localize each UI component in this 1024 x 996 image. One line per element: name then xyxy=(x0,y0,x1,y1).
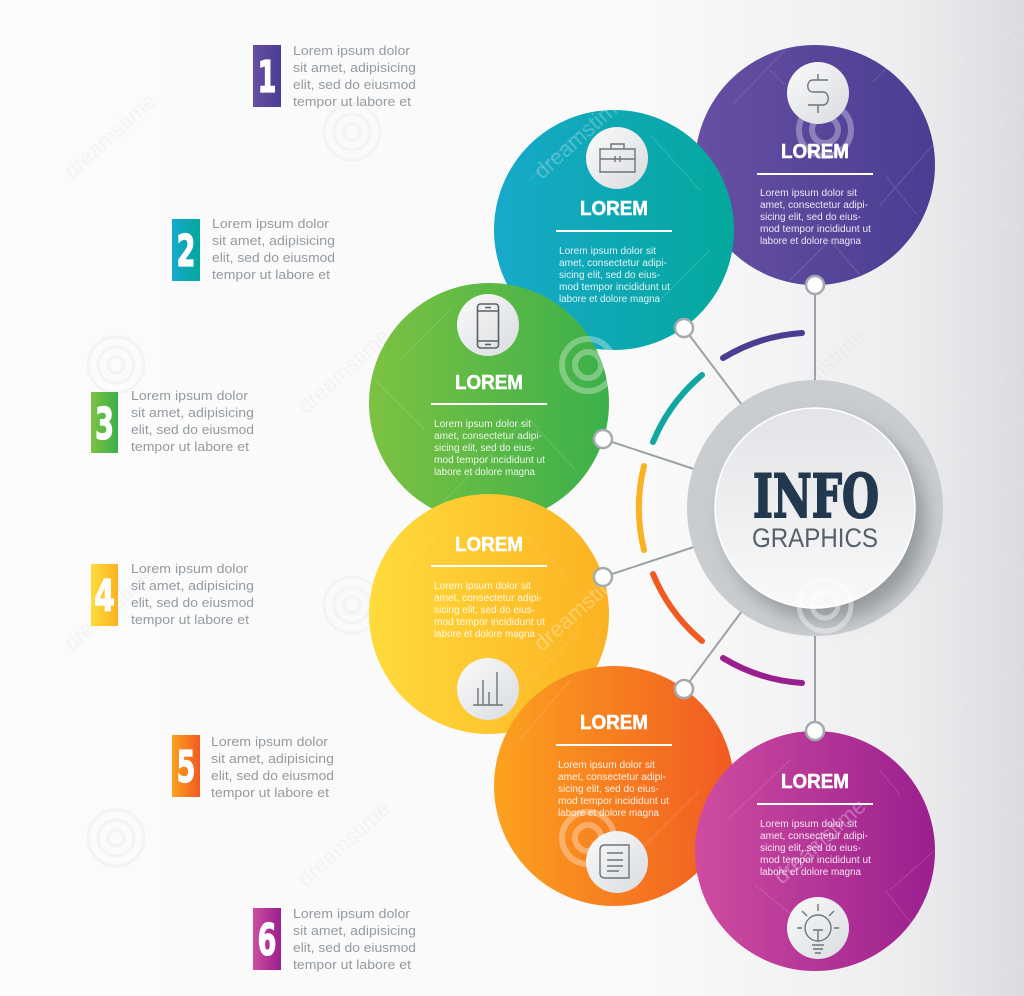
panel: yellow circle xyxy=(369,494,631,734)
legend item 1: elit, sed do eiusmod xyxy=(293,77,416,92)
icon: briefcase xyxy=(586,127,648,189)
text: magenta: Lorem ipsum dolor sit xyxy=(760,819,857,830)
text: purple xyxy=(760,188,871,247)
text: yellow: labore et dolore magna xyxy=(434,629,535,640)
legend item 5: 5 xyxy=(176,742,196,793)
heading: magenta: LOREM xyxy=(781,771,849,793)
text: magenta xyxy=(760,819,871,878)
icon: smartphone xyxy=(457,294,519,356)
text: orange xyxy=(558,760,669,819)
legend item 6 xyxy=(253,906,416,972)
text: yellow: mod tempor incididunt ut xyxy=(434,617,545,628)
text: magenta: sicing elit, sed do eius- xyxy=(760,843,861,854)
icon: dollar xyxy=(787,62,849,124)
text: teal xyxy=(559,246,670,305)
watermark text on background: dreamstime xyxy=(59,88,161,184)
heading: purple: LOREM xyxy=(781,141,849,163)
panel: magenta circle xyxy=(695,731,935,971)
heading: orange: LOREM xyxy=(580,712,648,734)
heading: green: LOREM xyxy=(455,372,523,394)
watermark text on background: dreamstime xyxy=(293,796,395,892)
text: purple: Lorem ipsum dolor sit xyxy=(760,188,857,199)
text: magenta: labore et dolore magna xyxy=(760,867,861,878)
text: orange: sicing elit, sed do eius- xyxy=(558,784,659,795)
legend item 3: tempor ut labore et xyxy=(131,439,249,454)
legend item 4: tempor ut labore et xyxy=(131,612,249,627)
text: yellow: amet, consectetur adipi- xyxy=(434,593,542,604)
text: orange: Lorem ipsum dolor sit xyxy=(558,760,655,771)
watermark text on background: dreamstime xyxy=(293,323,395,419)
panel: teal circle xyxy=(494,88,734,350)
legend item 2: Lorem ipsum dolor xyxy=(212,216,330,231)
legend item 6: elit, sed do eiusmod xyxy=(293,940,416,955)
title: GRAPHICS: GRAPHICS xyxy=(752,523,878,553)
text: magenta: amet, consectetur adipi- xyxy=(760,831,868,842)
panel: green circle xyxy=(369,283,614,523)
panel: purple circle xyxy=(695,45,935,285)
text: orange: mod tempor incididunt ut xyxy=(558,796,669,807)
panel: magenta circle: dreamstime xyxy=(769,793,871,889)
text: green: amet, consectetur adipi- xyxy=(434,431,542,442)
icon: light bulb xyxy=(787,897,849,959)
legend item 3: sit amet, adipisicing xyxy=(131,405,254,420)
legend item 2 xyxy=(172,216,335,282)
text: teal: labore et dolore magna xyxy=(559,294,660,305)
connectors xyxy=(603,285,815,731)
legend item 5: tempor ut labore et xyxy=(211,785,329,800)
legend item 4 xyxy=(91,561,254,627)
legend item 2: tempor ut labore et xyxy=(212,267,330,282)
text: orange: amet, consectetur adipi- xyxy=(558,772,666,783)
legend item 4: elit, sed do eiusmod xyxy=(131,595,254,610)
legend item 3 xyxy=(91,388,254,454)
watermark text on background xyxy=(59,88,871,892)
text: teal: amet, consectetur adipi- xyxy=(559,258,667,269)
text: green xyxy=(434,419,545,478)
heading: teal: LOREM xyxy=(580,198,648,220)
legend item 6: 6 xyxy=(258,915,276,966)
center hub xyxy=(687,380,943,636)
text: magenta: mod tempor incididunt ut xyxy=(760,855,871,866)
text: green: Lorem ipsum dolor sit xyxy=(434,419,531,430)
legend item 2: sit amet, adipisicing xyxy=(212,233,335,248)
icon: document xyxy=(586,831,648,893)
connector nodes xyxy=(594,276,824,740)
heading: yellow: LOREM xyxy=(455,534,523,556)
legend item 4: 4 xyxy=(94,571,115,622)
legend item 1: 1 xyxy=(258,52,276,103)
text: purple: labore et dolore magna xyxy=(760,236,861,247)
text: purple: mod tempor incididunt ut xyxy=(760,224,871,235)
text: purple: sicing elit, sed do eius- xyxy=(760,212,861,223)
text: yellow: Lorem ipsum dolor sit xyxy=(434,581,531,592)
legend item 6: sit amet, adipisicing xyxy=(293,923,416,938)
legend item 4: sit amet, adipisicing xyxy=(131,578,254,593)
legend item 1: Lorem ipsum dolor xyxy=(293,43,411,58)
legend item 3: Lorem ipsum dolor xyxy=(131,388,249,403)
watermark text on background: dreamstime xyxy=(59,560,161,656)
legend item 3: 3 xyxy=(95,399,114,450)
panel: teal circle: dreamstime xyxy=(529,88,631,184)
text: yellow xyxy=(434,581,545,640)
legend item 5: Lorem ipsum dolor xyxy=(211,734,329,749)
legend item 5: elit, sed do eiusmod xyxy=(211,768,334,783)
panel: yellow circle: dreamstime xyxy=(529,560,631,656)
legend item 5 xyxy=(172,734,334,800)
legend item 3: elit, sed do eiusmod xyxy=(131,422,254,437)
legend item 2: elit, sed do eiusmod xyxy=(212,250,335,265)
text: green: mod tempor incididunt ut xyxy=(434,455,545,466)
legend item 1: tempor ut labore et xyxy=(293,94,411,109)
legend item 6: tempor ut labore et xyxy=(293,957,411,972)
text: green: sicing elit, sed do eius- xyxy=(434,443,535,454)
text: purple: amet, consectetur adipi- xyxy=(760,200,868,211)
text: teal: mod tempor incididunt ut xyxy=(559,282,670,293)
text: green: labore et dolore magna xyxy=(434,467,535,478)
panel: orange circle xyxy=(494,666,734,906)
legend item 1: sit amet, adipisicing xyxy=(293,60,416,75)
legend item 1 xyxy=(253,43,416,109)
text: teal: sicing elit, sed do eius- xyxy=(559,270,660,281)
legend item 2: 2 xyxy=(176,226,196,277)
text: yellow: sicing elit, sed do eius- xyxy=(434,605,535,616)
icon: bar chart xyxy=(457,658,519,720)
legend item 6: Lorem ipsum dolor xyxy=(293,906,411,921)
legend item 4: Lorem ipsum dolor xyxy=(131,561,249,576)
watermark spirals on background xyxy=(88,104,380,866)
legend item 5: sit amet, adipisicing xyxy=(211,751,334,766)
background watermark lines xyxy=(900,25,1024,996)
title: INFO: INFO xyxy=(753,462,879,532)
text: orange: labore et dolore magna xyxy=(558,808,659,819)
watermark text on background: dreamstime xyxy=(769,323,871,419)
text: teal: Lorem ipsum dolor sit xyxy=(559,246,656,257)
arcs xyxy=(639,333,802,683)
